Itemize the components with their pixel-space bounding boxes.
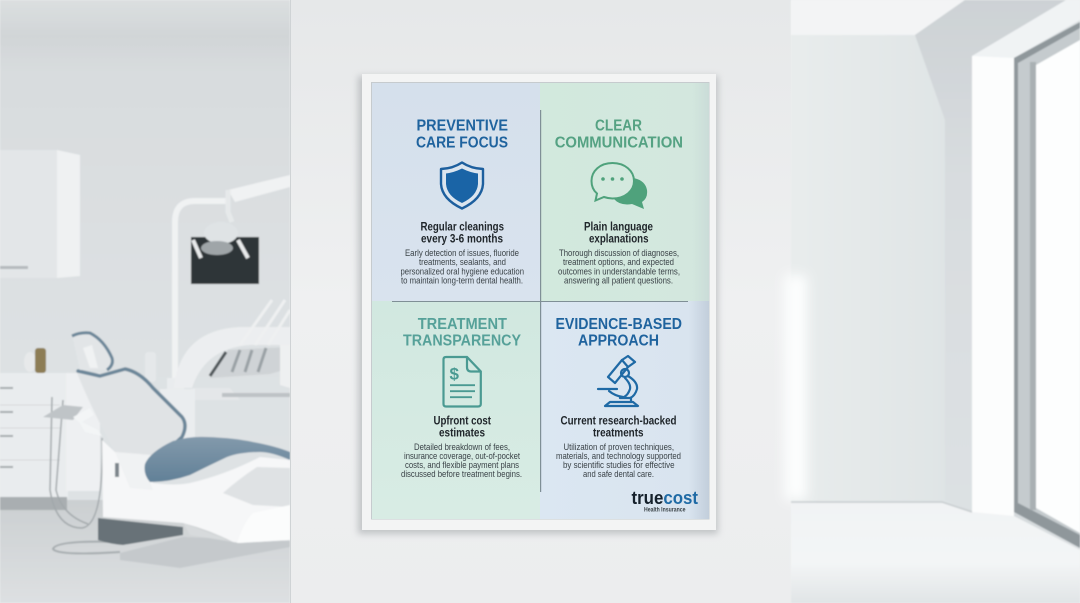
background: bright room with window [785, 0, 1080, 603]
logo: truecost health insurance: truecost [632, 488, 698, 508]
body text: personalized oral hygiene education [400, 265, 524, 276]
body text: by scientific studies for effective [563, 459, 674, 470]
icon: cost document [444, 357, 481, 406]
body text: Utilization of proven techniques, [564, 441, 674, 452]
subheading [420, 220, 504, 246]
subheading: treatments [593, 426, 644, 440]
body text: discussed before treatment begins. [401, 468, 522, 479]
heading: evidence-based approach: EVIDENCE-BASED [556, 316, 682, 333]
wall cabinet [0, 150, 80, 278]
subheading: Regular cleanings [420, 220, 504, 234]
drawer unit [0, 348, 100, 510]
icon: microscope [598, 356, 638, 406]
wall light patch [785, 275, 807, 500]
poster: quadrant backgrounds [372, 83, 709, 519]
lamp head [190, 236, 251, 260]
panel: clear communication [555, 118, 683, 285]
heading: evidence-based approach: APPROACH [578, 333, 659, 350]
subheading [560, 413, 676, 440]
subheading: explanations [589, 232, 649, 246]
hoses [50, 397, 102, 528]
body text [400, 247, 524, 285]
body text: and safe dental care. [583, 468, 654, 479]
heading: preventive care focus [416, 118, 508, 151]
icon: cost document: $ [450, 364, 460, 384]
body text: materials, and technology supported [556, 450, 681, 461]
subheading: estimates [439, 426, 485, 440]
heading: clear communication [555, 118, 683, 151]
wall monitor [191, 237, 259, 284]
heading: clear communication: COMMUNICATION [555, 134, 683, 151]
body text: answering all patient questions. [564, 274, 673, 285]
window frame [1014, 22, 1080, 548]
subheading: every 3-6 months [421, 232, 503, 246]
dental chair [72, 333, 290, 568]
ceiling [791, 0, 965, 35]
panel: preventive care focus [400, 118, 524, 285]
background: centre wall panel [290, 0, 791, 603]
heading: treatment transparency: TREATMENT [418, 316, 507, 333]
body text: costs, and flexible payment plans [405, 459, 519, 470]
body text [556, 441, 681, 479]
poster frame [362, 74, 716, 530]
dental lamp arm [167, 175, 290, 393]
subheading: Plain language [584, 220, 653, 234]
body text: Early detection of issues, fluoride [405, 247, 519, 258]
heading: preventive care focus: CARE FOCUS [416, 134, 508, 151]
background: dental clinic room [0, 0, 290, 603]
heading: treatment transparency: TRANSPARENCY [403, 333, 521, 350]
body text [558, 247, 680, 285]
heading: treatment transparency [403, 316, 521, 350]
body text: insurance coverage, out-of-pocket [404, 450, 520, 461]
subheading [584, 220, 653, 246]
tray arm and instruments [174, 300, 290, 400]
side wall soffit [915, 0, 1066, 510]
subheading [434, 413, 491, 440]
panel: treatment transparency [401, 316, 522, 479]
cabinet behind chair [160, 389, 195, 438]
subheading: Current research-backed [560, 413, 676, 427]
panel: evidence-based approach [556, 316, 682, 479]
body text: Thorough discussion of diagnoses, [559, 247, 679, 258]
floor [791, 503, 1080, 603]
icon: shield [441, 162, 483, 208]
window reveal [972, 56, 1014, 516]
heading: preventive care focus: PREVENTIVE [416, 118, 508, 135]
body text: to maintain long-term dental health. [401, 274, 523, 285]
poster shadow [358, 76, 718, 534]
icon: speech bubbles [592, 163, 647, 209]
heading: clear communication: CLEAR [595, 118, 642, 135]
body text: treatment options, and expected [563, 256, 674, 267]
subheading: Upfront cost [434, 413, 491, 427]
body text [401, 441, 522, 479]
heading: evidence-based approach [556, 316, 682, 350]
body text: Detailed breakdown of fees, [414, 441, 510, 452]
body text: outcomes in understandable terms, [558, 265, 680, 276]
body text: treatments, sealants, and [419, 256, 506, 267]
logo: truecost health insurance: Health Insurance [644, 507, 686, 514]
